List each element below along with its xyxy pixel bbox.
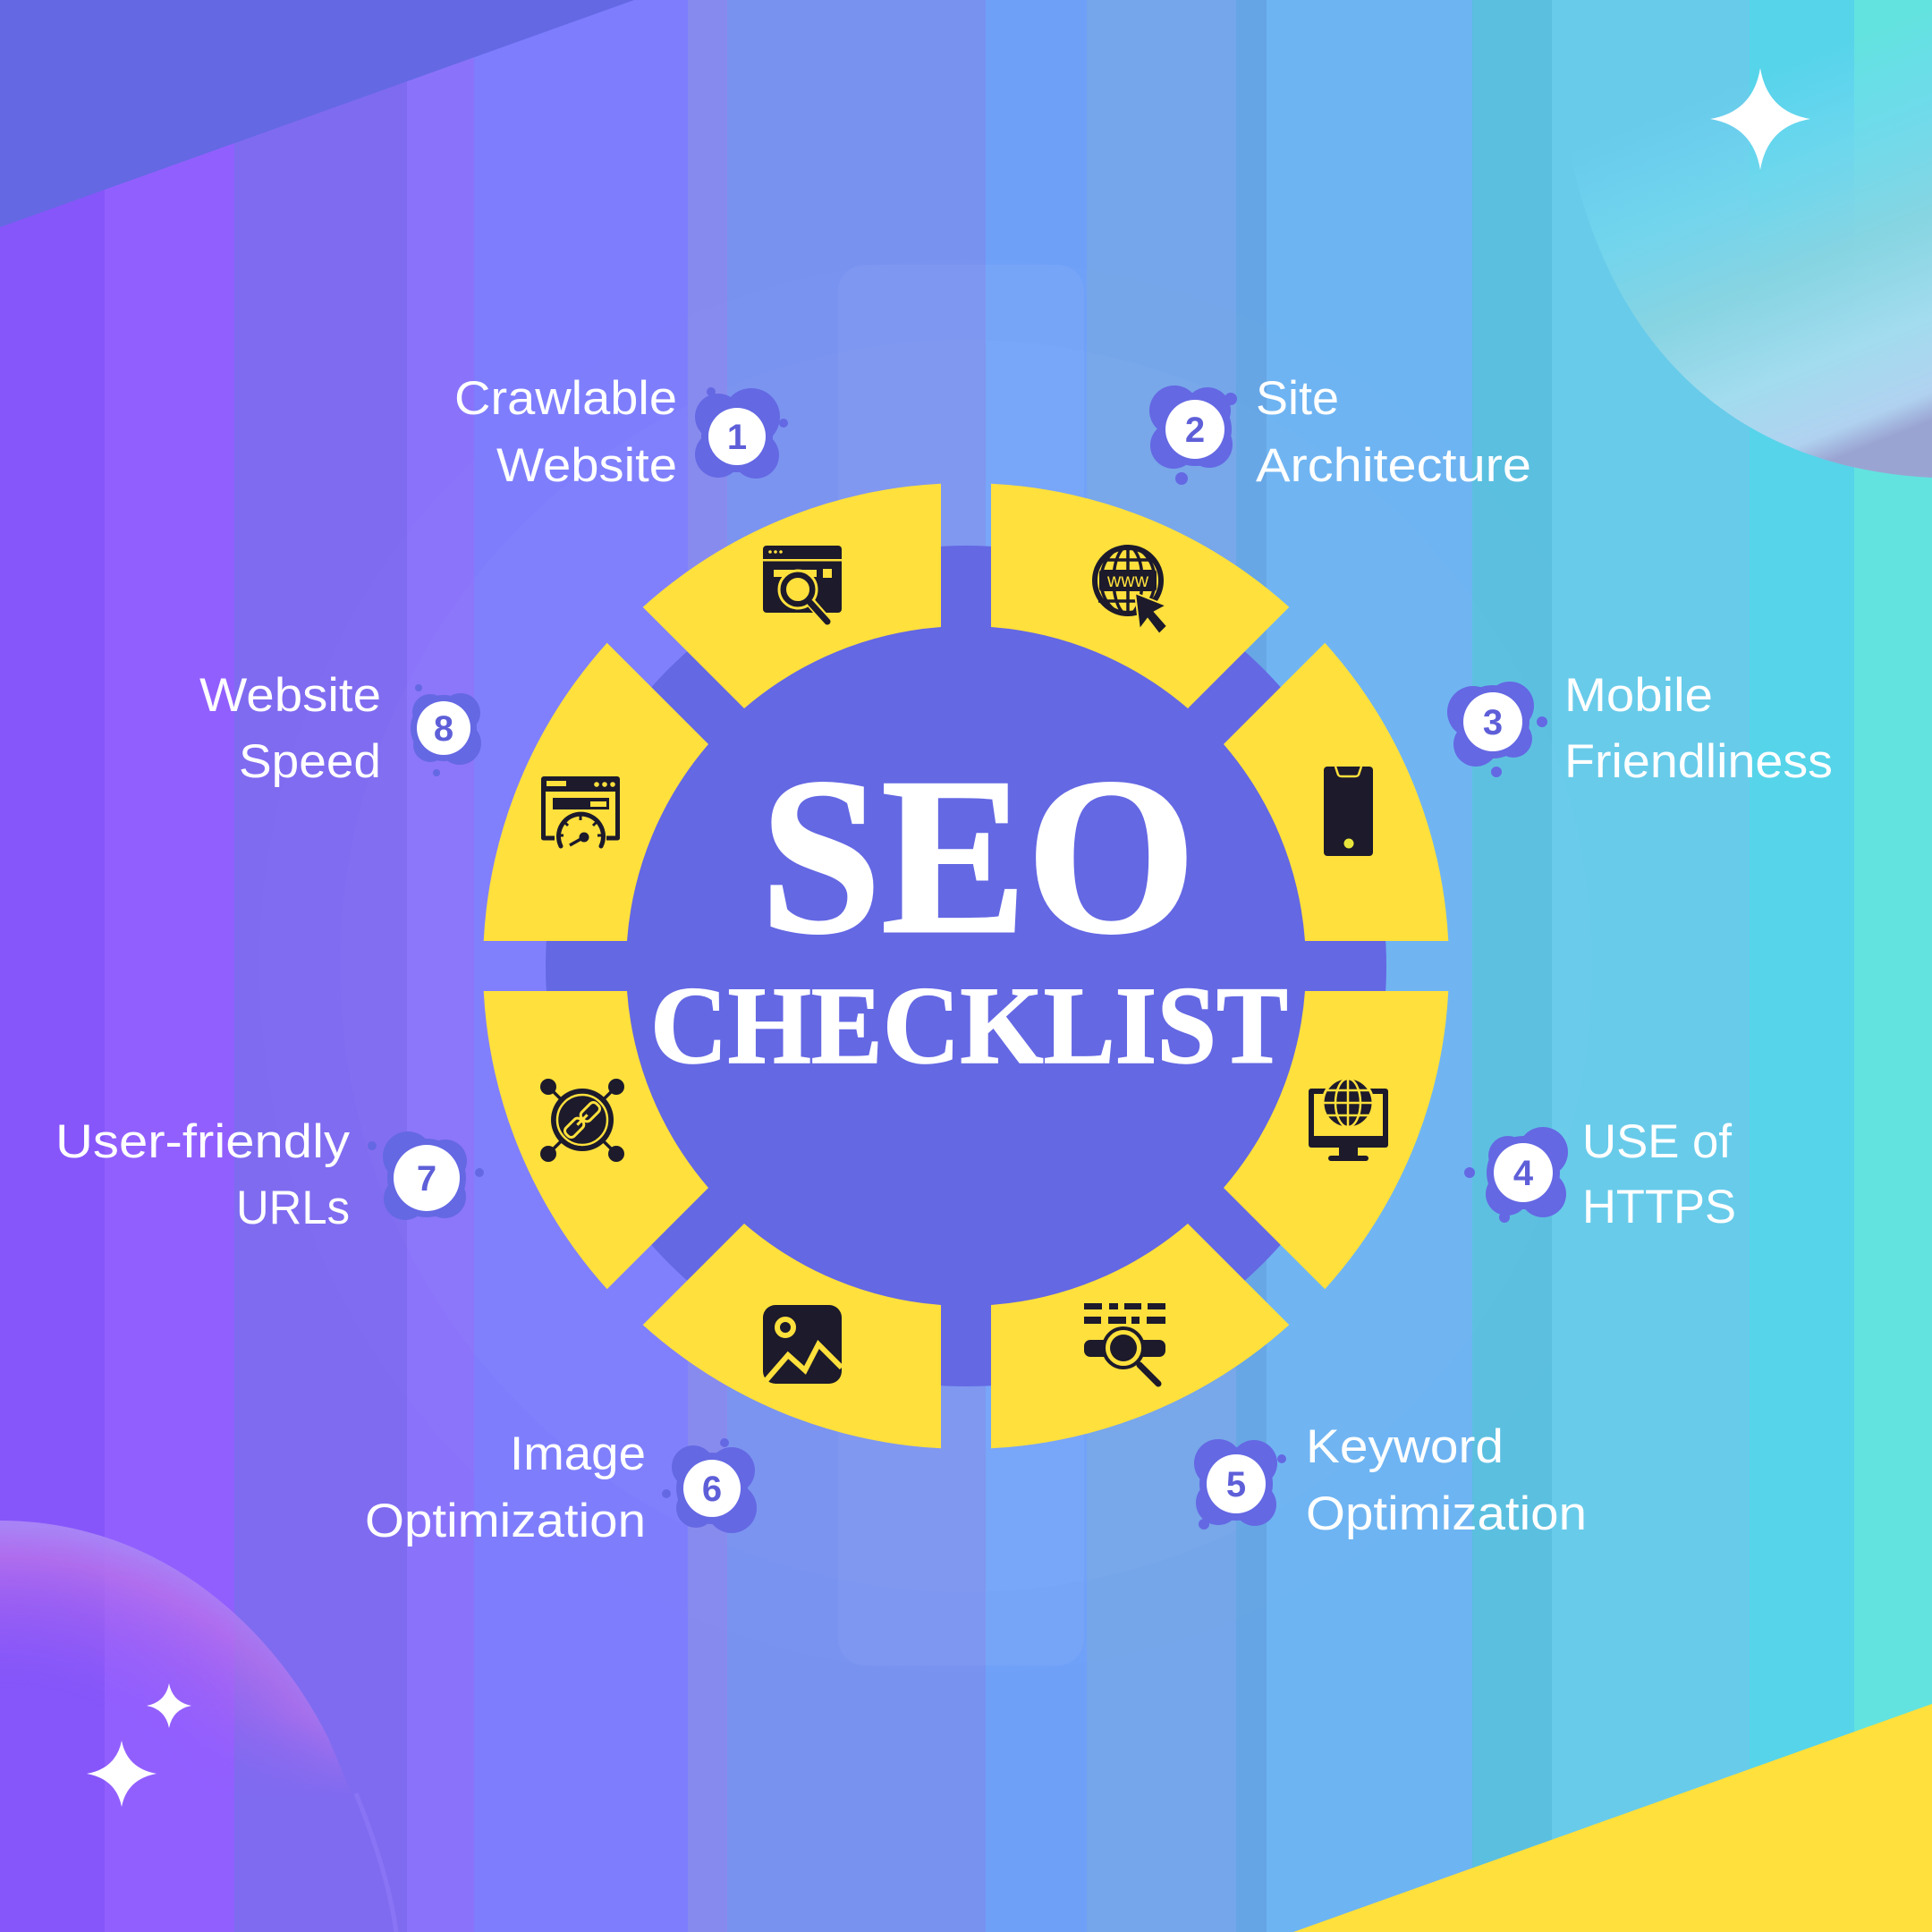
badge 7 <box>368 1131 484 1220</box>
segment 8 <box>484 643 708 941</box>
label 7: URLs <box>236 1182 350 1234</box>
badge 2 <box>1149 386 1237 485</box>
sparkle bottom-left small <box>147 1683 191 1728</box>
badge 7: 7 <box>417 1159 436 1199</box>
icon: link network <box>540 1079 624 1162</box>
segment 4 <box>1224 991 1448 1289</box>
label 4: USE of <box>1582 1115 1732 1168</box>
label 7 <box>55 1115 351 1234</box>
wheel: eight yellow segments <box>484 484 1448 1448</box>
bubble top-right <box>1555 0 1932 478</box>
sparkle bottom-left large <box>87 1741 157 1807</box>
bubble bottom-left <box>0 1521 396 1932</box>
segment 3 <box>1224 643 1448 941</box>
label 5: Keyword <box>1306 1420 1504 1473</box>
bottom-right yellow triangle <box>1293 1704 1932 1932</box>
icon: browser search <box>763 546 842 622</box>
label 1: Website <box>496 439 677 492</box>
label 8 <box>199 669 381 788</box>
label 2: Site <box>1256 372 1339 425</box>
label 6: Optimization <box>365 1495 646 1547</box>
center circle <box>546 546 1386 1386</box>
icon: monitor with globe <box>1309 1078 1388 1161</box>
segment 7 <box>484 991 708 1289</box>
item 3: Mobile Friendliness <box>1447 669 1833 788</box>
label 8: Website <box>199 669 381 722</box>
item 1: Crawlable Website <box>454 372 788 492</box>
label 8: Speed <box>239 735 381 788</box>
badge 4 <box>1464 1127 1568 1223</box>
badge 5 <box>1194 1439 1286 1530</box>
label 3: Friendliness <box>1564 735 1833 788</box>
top-left corner triangle <box>0 0 634 227</box>
item 2: Site Architecture <box>1149 372 1531 492</box>
badge 6 <box>662 1438 757 1533</box>
item 6: Image Optimization <box>365 1428 757 1547</box>
badge 3: 3 <box>1483 703 1503 742</box>
badge 1: 1 <box>727 418 747 457</box>
badge 8: 8 <box>434 709 453 749</box>
label 2 <box>1256 372 1531 492</box>
label 7: User-friendly <box>55 1115 351 1168</box>
label 2: Architecture <box>1256 439 1531 492</box>
sparkle top-right <box>1710 68 1810 170</box>
segment 2 <box>991 484 1289 708</box>
badge 1 <box>695 387 788 479</box>
badge 5: 5 <box>1226 1465 1246 1504</box>
title: CHECKLIST: CHECKLIST <box>650 964 1288 1087</box>
badge 4: 4 <box>1513 1154 1534 1193</box>
label 5: Optimization <box>1306 1487 1587 1540</box>
label 3 <box>1564 669 1833 788</box>
item 7: User-friendly URLs <box>55 1115 484 1234</box>
segment 6 <box>643 1224 941 1448</box>
label 1 <box>454 372 677 492</box>
item 8: Website Speed <box>199 669 481 788</box>
icon: www globe with cursor <box>1095 547 1167 634</box>
icon: keyword search <box>1084 1303 1165 1384</box>
item 4: USE of HTTPS <box>1464 1115 1736 1233</box>
icon: www globe with cursor: www <box>1106 571 1149 591</box>
label 6: Image <box>510 1428 646 1480</box>
label 1: Crawlable <box>454 372 677 425</box>
title: SEO: SEO <box>760 733 1196 980</box>
label 4 <box>1582 1115 1736 1233</box>
label 5 <box>1306 1420 1587 1540</box>
icon: image <box>763 1305 842 1384</box>
label 6 <box>365 1428 646 1547</box>
badge 3 <box>1447 682 1547 777</box>
badge 2: 2 <box>1185 411 1205 450</box>
icon: website speed gauge <box>541 776 620 846</box>
badge 8 <box>411 684 481 776</box>
label 3: Mobile <box>1564 669 1713 722</box>
icon: mobile phone <box>1324 767 1373 856</box>
label 4: HTTPS <box>1582 1181 1736 1233</box>
badge 6: 6 <box>702 1470 722 1509</box>
segment 1 <box>643 484 941 708</box>
segment 5 <box>991 1224 1289 1448</box>
item 5: Keyword Optimization <box>1194 1420 1587 1540</box>
